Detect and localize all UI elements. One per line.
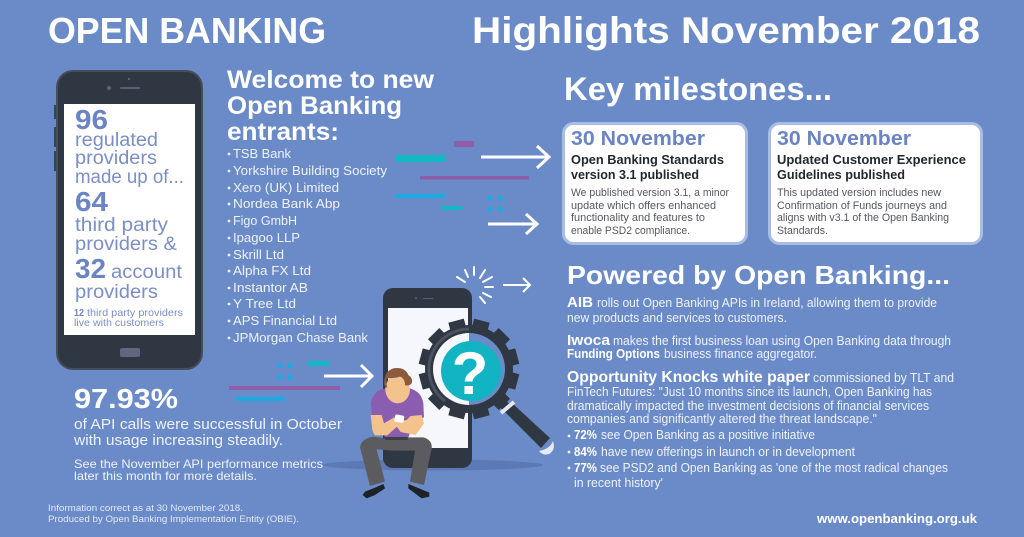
panel: milestone guidelines: aligns with v3.1 of the Open Banking xyxy=(777,212,949,224)
list of new entrants: JPMorgan Chase Bank xyxy=(233,330,368,345)
panel: milestone standards: update which offers enhanced xyxy=(571,200,716,212)
magnifying glass with question mark xyxy=(429,329,554,455)
phone with provider statistics xyxy=(54,70,203,370)
footer: source note: Produced by Open Banking Implementation Entity (OBIE). xyxy=(48,514,299,525)
text block: Iwoca: Iwoca xyxy=(567,333,611,349)
list of new entrants: Figo GmbH xyxy=(233,213,297,228)
text block: Iwoca xyxy=(567,333,951,361)
statistic: 96 regulated providers: regulated xyxy=(75,130,158,151)
bullet list: survey findings: 84% xyxy=(574,445,597,459)
list of new entrants: Instantor AB xyxy=(233,280,308,295)
heading: powered by open banking: Powered by Open Banking... xyxy=(567,260,950,290)
panel: milestone standards: functionality and features to xyxy=(571,212,705,224)
list of new entrants: Yorkshire Building Society xyxy=(233,163,388,178)
list of new entrants: APS Financial Ltd xyxy=(233,313,337,328)
bullet list: survey findings: have new offerings in launch or in development xyxy=(601,445,855,459)
magnifying glass with question mark: ? xyxy=(452,340,488,407)
statistic: 32 account providers: account xyxy=(111,262,183,283)
text block: Iwoca: Funding Options xyxy=(567,347,660,361)
heading: welcome to new entrants: entrants: xyxy=(227,118,339,146)
panel: milestone guidelines: 30 November xyxy=(777,128,911,150)
arrow: from sparkle xyxy=(503,278,530,292)
phone body xyxy=(54,70,203,370)
text block: Iwoca: business finance aggregator. xyxy=(664,347,817,361)
statistic: 96 regulated providers xyxy=(75,104,184,188)
footer: source note: Information correct as at 30 November 2018. xyxy=(48,503,243,514)
statistic: 12 live providers: live with customers xyxy=(74,317,164,329)
heading: welcome to new entrants: Open Banking xyxy=(227,92,402,120)
statistic: 12 live providers: 12 xyxy=(74,307,84,319)
statistic: 12 live providers xyxy=(74,307,183,329)
arrow: to second line xyxy=(488,214,537,234)
footer: source note xyxy=(48,503,299,525)
panel: milestone standards xyxy=(564,124,746,244)
statistic: 32 account providers xyxy=(75,253,183,303)
footer: website: www.openbanking.org.uk xyxy=(816,511,978,526)
list of new entrants: Nordea Bank Abp xyxy=(233,196,340,211)
text block: AIB: rolls out Open Banking APIs in Ireland, allowing them to provide xyxy=(597,296,937,310)
text block: AIB xyxy=(567,295,937,325)
panel: milestone guidelines: Updated Customer Experience xyxy=(777,152,966,167)
statistic: 12 live providers: third party providers xyxy=(87,307,183,319)
person xyxy=(360,368,432,498)
note: API performance metrics xyxy=(74,457,323,483)
title: Highlights November 2018: Highlights November 2018 xyxy=(472,10,980,51)
list of new entrants: Skrill Ltd xyxy=(233,247,284,262)
list of new entrants: Y Tree Ltd xyxy=(233,296,296,311)
statistic: API call success rate: of API calls were successful in October xyxy=(74,417,342,433)
text block: AIB: AIB xyxy=(567,295,593,311)
panel: milestone standards: version 3.1 published xyxy=(571,167,699,182)
panel: milestone guidelines xyxy=(770,124,982,244)
text block: Opportunity Knocks white paper: Opportunity Knocks white paper xyxy=(567,369,810,386)
illustration: person with phone and magnifier xyxy=(323,288,554,498)
heading: welcome to new entrants: Welcome to new xyxy=(227,66,435,94)
text block: Opportunity Knocks white paper xyxy=(567,369,954,426)
bullet list: survey findings: see PSD2 and Open Banking as 'one of the most radical changes xyxy=(600,461,948,475)
note: API performance metrics: later this month for more details. xyxy=(74,469,257,483)
arrow: toward illustration xyxy=(324,365,372,387)
heading: key milestones: Key milestones... xyxy=(564,71,832,107)
text block: AIB: new products and services to customers. xyxy=(567,311,787,325)
note: API performance metrics: See the November API performance metrics xyxy=(74,457,323,471)
bullet list: survey findings: in recent history' xyxy=(574,476,663,490)
statistic: API call success rate xyxy=(73,383,342,449)
ground shadow xyxy=(323,460,543,470)
text block: Opportunity Knocks white paper: FinTech Futures: "Just 10 months since its launch, Open Banking has xyxy=(567,385,932,399)
statistic: API call success rate: with usage increasing steadily. xyxy=(73,433,283,449)
panel: milestone guidelines: Standards. xyxy=(777,225,828,237)
list of new entrants: TSB Bank xyxy=(233,146,291,161)
panel: milestone guidelines: This updated version includes new xyxy=(777,187,941,199)
text block: Iwoca: makes the first business loan using Open Banking data through xyxy=(613,334,951,348)
panel: milestone guidelines: Confirmation of Funds journeys and xyxy=(777,200,947,212)
list of new entrants xyxy=(228,146,388,345)
panel: milestone standards: We published version 3.1, a minor xyxy=(571,187,729,199)
arrow: to first milestone xyxy=(481,146,549,168)
statistic: 64 third party providers xyxy=(75,186,177,255)
statistic: API call success rate: 97.93% xyxy=(74,383,178,414)
statistic: 64 third party providers: third party xyxy=(75,215,169,236)
decorative speed lines, lower xyxy=(229,361,340,401)
text block: Opportunity Knocks white paper: companies and significantly altered the threat landscape." xyxy=(567,412,877,426)
gear xyxy=(419,319,519,419)
text block: Opportunity Knocks white paper: dramatically impacted the investment decisions of financial services xyxy=(567,399,929,413)
panel: milestone standards: enable PSD2 compliance. xyxy=(571,225,690,237)
statistic: 32 account providers: providers xyxy=(75,282,158,303)
bullet list: survey findings: 77% xyxy=(574,461,597,475)
list of new entrants: Xero (UK) Limited xyxy=(233,180,339,195)
bullet list: survey findings: 72% xyxy=(574,428,597,442)
heading: welcome to new entrants xyxy=(227,66,435,146)
icon: sparkle rays xyxy=(457,267,493,303)
statistic: 32 account providers: 32 xyxy=(75,253,106,284)
statistic: 64 third party providers: providers & xyxy=(75,234,177,255)
panel: milestone standards: Open Banking Standards xyxy=(571,152,724,167)
decorative speed lines, upper xyxy=(396,141,529,213)
panel: milestone guidelines: Guidelines published xyxy=(777,167,905,182)
statistic: 96 regulated providers: providers xyxy=(75,148,157,169)
list of new entrants: Alpha FX Ltd xyxy=(233,263,311,278)
bullet list: survey findings xyxy=(568,428,948,490)
statistic: 96 regulated providers: 96 xyxy=(75,104,108,135)
statistic: 64 third party providers: 64 xyxy=(75,186,108,217)
panel: milestone standards: 30 November xyxy=(571,128,705,150)
large phone xyxy=(383,288,472,468)
title: Open Banking: OPEN BANKING xyxy=(48,10,326,51)
bullet list: survey findings: see Open Banking as a positive initiative xyxy=(601,428,815,442)
list of new entrants: Ipagoo LLP xyxy=(233,230,300,245)
statistic: 96 regulated providers: made up of... xyxy=(75,167,184,188)
text block: Opportunity Knocks white paper: commissioned by TLT and xyxy=(813,371,954,385)
